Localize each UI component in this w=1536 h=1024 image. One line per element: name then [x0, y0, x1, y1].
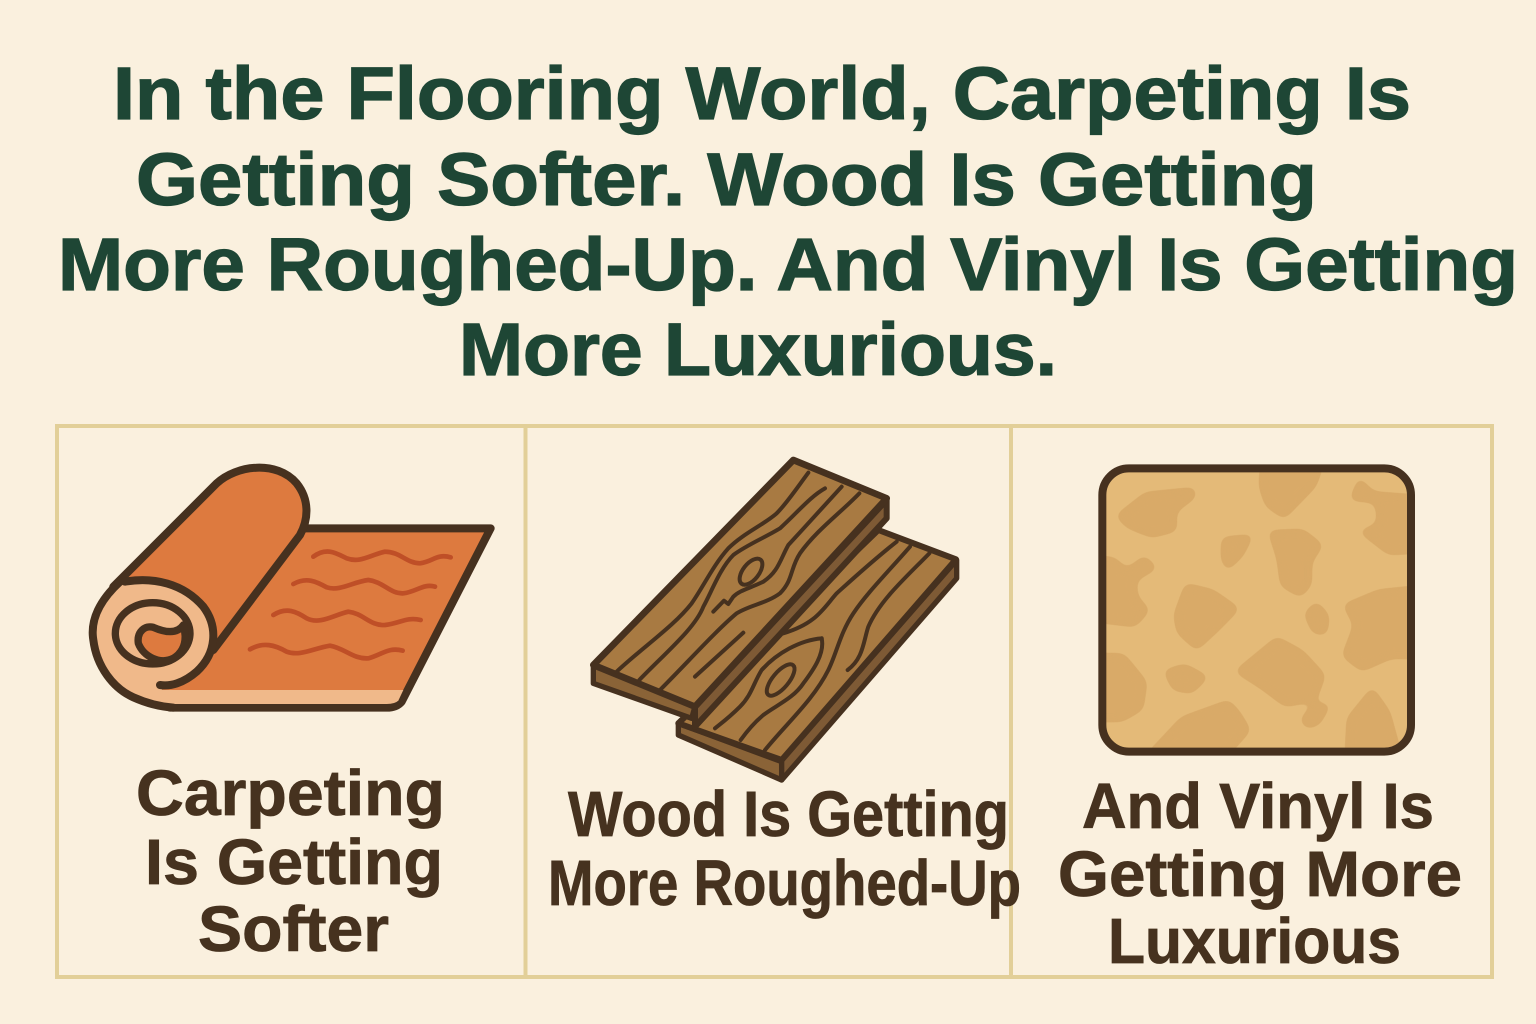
panel: vinyl: [1058, 462, 1462, 977]
icon: vinyl tile: [1092, 462, 1425, 758]
panel: wood: [548, 460, 1021, 919]
carpet texture waves: [250, 551, 451, 658]
label: vinyl: And Vinyl Is: [1082, 770, 1434, 842]
title: Getting Softer. Wood Is Getting: [136, 138, 1317, 221]
icon: wood planks: [593, 460, 957, 780]
label: carpeting: [136, 757, 445, 965]
panel frame with three columns: [57, 426, 1492, 977]
label: wood: More Roughed-Up: [548, 847, 1021, 919]
label: vinyl: Luxurious: [1108, 905, 1401, 977]
title: [58, 52, 1518, 391]
label: carpeting: Softer: [198, 893, 389, 965]
title: More Roughed-Up. And Vinyl Is Getting: [58, 223, 1518, 306]
label: wood: Wood Is Getting: [568, 778, 1009, 850]
label: vinyl: Getting More: [1058, 838, 1462, 910]
title: More Luxurious.: [459, 308, 1057, 391]
label: wood: [548, 778, 1021, 919]
label: vinyl: [1058, 770, 1462, 977]
panel: carpeting: [93, 468, 491, 965]
label: carpeting: Carpeting: [136, 757, 445, 829]
title: In the Flooring World, Carpeting Is: [113, 52, 1411, 135]
label: carpeting: Is Getting: [145, 826, 443, 898]
icon: carpet roll: [93, 468, 491, 708]
